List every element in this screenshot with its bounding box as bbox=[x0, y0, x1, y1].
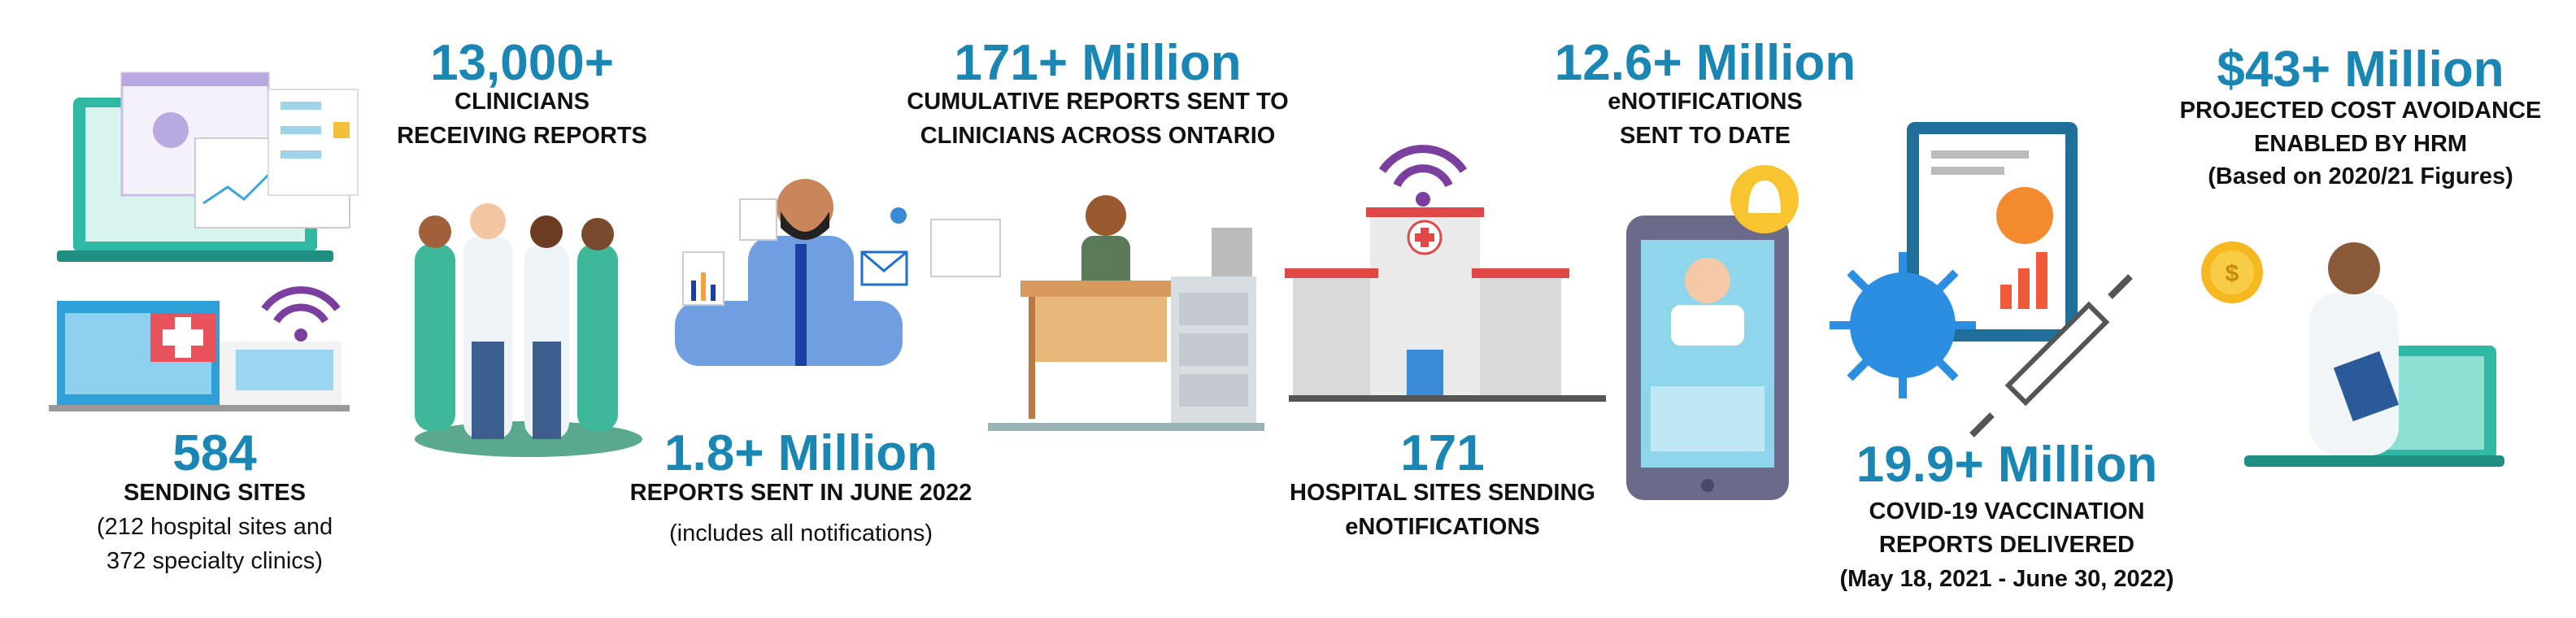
text: $43+ Million cost avoidance: (Based on 2020/21 Figures) bbox=[2208, 163, 2513, 189]
icon: group of clinicians bbox=[415, 203, 642, 457]
text: 171+ Million cumulative bbox=[907, 35, 1289, 149]
text: 171+ Million cumulative: 171+ Million bbox=[954, 35, 1242, 91]
text: 584 sending sites: SENDING SITES bbox=[124, 480, 306, 506]
text: 19.9+ Million covid reports bbox=[1839, 437, 2174, 592]
text: 13,000+ clinicians: RECEIVING REPORTS bbox=[397, 123, 647, 149]
icon: hospital with wifi bbox=[1285, 149, 1606, 402]
text: 12.6+ Million eNotifications: 12.6+ Million bbox=[1555, 35, 1856, 91]
icon: doctor in laptop with coin bbox=[2201, 242, 2504, 467]
text: 171+ Million cumulative: CLINICIANS ACROSS ONTARIO bbox=[920, 123, 1275, 149]
text: 1.8+ Million reports bbox=[630, 425, 972, 546]
text: $43+ Million cost avoidance: ENABLED BY HRM bbox=[2254, 131, 2467, 157]
text: 1.8+ Million reports: (includes all notifications) bbox=[669, 520, 933, 546]
text: 13,000+ clinicians: CLINICIANS bbox=[455, 89, 590, 115]
text: 19.9+ Million covid reports: 19.9+ Million bbox=[1856, 437, 2157, 493]
icon: laptop with dashboard bbox=[57, 73, 358, 262]
icon: report document with chart bbox=[1907, 122, 2078, 342]
text: 19.9+ Million covid reports: (May 18, 2021 - June 30, 2022) bbox=[1839, 566, 2174, 592]
text: 584 sending sites: (212 hospital sites and bbox=[97, 514, 333, 540]
text: $43+ Million cost avoidance: $43+ Million bbox=[2217, 41, 2504, 98]
icon: hospital buildings with wifi bbox=[49, 290, 350, 411]
text: 1.8+ Million reports: 1.8+ Million bbox=[664, 425, 938, 481]
icon: man with envelope and charts bbox=[675, 179, 1000, 366]
text: 584 sending sites: 584 bbox=[172, 425, 257, 481]
icon: doctor in laptop with coin: $ bbox=[2226, 260, 2239, 287]
icon: syringe bbox=[1972, 276, 2130, 435]
text: 171 hospital sites: HOSPITAL SITES SENDING bbox=[1290, 480, 1595, 506]
text: 12.6+ Million eNotifications bbox=[1555, 35, 1856, 149]
text: 584 sending sites: 372 specialty clinics) bbox=[107, 548, 323, 574]
text: $43+ Million cost avoidance: PROJECTED COST AVOIDANCE bbox=[2180, 98, 2541, 124]
text: 171 hospital sites bbox=[1290, 425, 1595, 540]
icon: phone with doctor and bell bbox=[1626, 165, 1799, 500]
text: 171+ Million cumulative: CUMULATIVE REPORTS SENT TO bbox=[907, 89, 1289, 115]
text: 12.6+ Million eNotifications: eNOTIFICATIONS bbox=[1608, 89, 1803, 115]
text: 13,000+ clinicians: 13,000+ bbox=[430, 35, 614, 91]
text: 19.9+ Million covid reports: COVID-19 VACCINATION bbox=[1869, 498, 2144, 524]
text: 12.6+ Million eNotifications: SENT TO DATE bbox=[1620, 123, 1791, 149]
text: 1.8+ Million reports: REPORTS SENT IN JUNE 2022 bbox=[630, 480, 972, 506]
text: $43+ Million cost avoidance bbox=[2180, 41, 2541, 189]
text: 171 hospital sites: eNOTIFICATIONS bbox=[1345, 514, 1540, 540]
text: 584 sending sites bbox=[97, 425, 333, 574]
text: 19.9+ Million covid reports: REPORTS DELIVERED bbox=[1879, 532, 2134, 558]
text: 171 hospital sites: 171 bbox=[1400, 425, 1485, 481]
text: 13,000+ clinicians bbox=[397, 35, 647, 149]
icon: woman at desk bbox=[988, 195, 1264, 431]
icon: virus bbox=[1830, 252, 1976, 398]
